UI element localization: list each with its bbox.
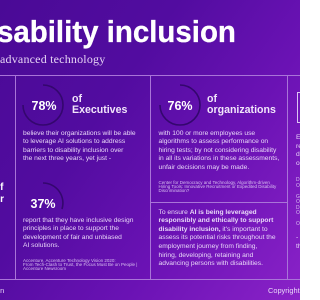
heading: of organizations: of [207, 93, 217, 105]
panel: right column [296, 92, 300, 250]
text: right column tail [296, 234, 300, 250]
text: executives body: believe their organizations will be able [23, 130, 136, 136]
panel: left edge fragment [0, 182, 4, 204]
panel: responsible AI text: assess its potential risks throughout the [158, 234, 276, 241]
stat: 76%: 76% [168, 99, 193, 113]
heading: of Executives: of [72, 93, 82, 105]
text: organizations body: unfair decisions may be made. [158, 164, 249, 171]
text: executives body: the next three years, yet just - [23, 155, 111, 162]
panel: responsible AI text: hiring, developing, retaining and [158, 252, 253, 259]
text: 37 percent body [23, 216, 134, 249]
panel: responsible AI text: responsibly and ethically to support [158, 217, 273, 224]
text: executives source: From Tech-Clash to Trust, the Focus Must Be on People | [23, 262, 137, 267]
text: organizations body: in all its variations in these assessments, [158, 155, 279, 162]
heading: of Executives [72, 93, 127, 116]
text: organizations source: Discrimination? [158, 188, 189, 193]
text: organizations body: hiring tests; by not considering disability [158, 147, 276, 154]
ring: 78 percent [22, 84, 64, 126]
text: organizations body: with 100 or more employees use [158, 130, 255, 136]
panel: responsible AI text: advancing persons with disabilities. [158, 260, 263, 267]
heading: of organizations [207, 93, 276, 116]
icon: right column list: G [296, 194, 300, 200]
text: organizations body: algorithms to assess performance on [158, 138, 268, 145]
stat: 78%: 78% [32, 99, 57, 113]
panel: responsible AI text: employment journey from finding, [158, 243, 257, 250]
text: organizations source [158, 180, 276, 193]
icon: right column list [296, 177, 300, 227]
panel: responsible AI text: disability inclusion, it's important to [158, 226, 268, 233]
text: organizations source: Hiring Tools: Innovative Recruitment or Expedited Disability [158, 184, 276, 189]
stat: 37%: 37% [30, 196, 56, 210]
icon: right column list: O [296, 199, 300, 205]
icon: right column list: O [296, 210, 300, 216]
panel: organizations [158, 84, 279, 193]
text: right column body [296, 134, 300, 167]
text: 37 percent body: report that they have inclusive design [23, 216, 133, 224]
panel: responsible AI text [158, 208, 276, 267]
title: sability inclusion [0, 14, 236, 49]
panel: responsible AI text: To ensure AI is being leveraged [158, 208, 257, 216]
text: organizations body [158, 130, 279, 171]
ring: 76 percent [159, 84, 201, 126]
text: executives body [23, 130, 136, 162]
icon: document frame [296, 92, 308, 123]
subtitle: advanced technology [0, 52, 105, 66]
text: executives source: Accenture, Accenture Technology Vision 2020: [23, 258, 116, 263]
text: executives source [23, 258, 137, 271]
heading: of Executives: Executives [72, 104, 127, 116]
panel: executives [22, 84, 137, 271]
icon: right column list: D [296, 177, 300, 183]
heading: of organizations: organizations [207, 104, 276, 116]
text: executives body: to leverage AI solutions to address [23, 138, 125, 145]
icon: right column list: O [296, 221, 300, 227]
text: 37 percent body: AI solutions. [23, 242, 59, 249]
text: 37 percent body: principles in place to support the [23, 225, 119, 232]
icon: right column list: O [296, 182, 300, 188]
text: executives source: Accenture Newsroom [23, 266, 66, 271]
footer: copyright: Copyright [268, 286, 300, 294]
text: 37 percent body: development of fair and unbiased [23, 234, 122, 241]
ring: 37 percent [43, 182, 64, 210]
text: executives body: barriers to disability inclusion over [23, 147, 123, 154]
text: organizations source: Center for Democracy and Technology, Algorithm-driven [158, 180, 270, 185]
icon: right column list: D [296, 204, 300, 210]
